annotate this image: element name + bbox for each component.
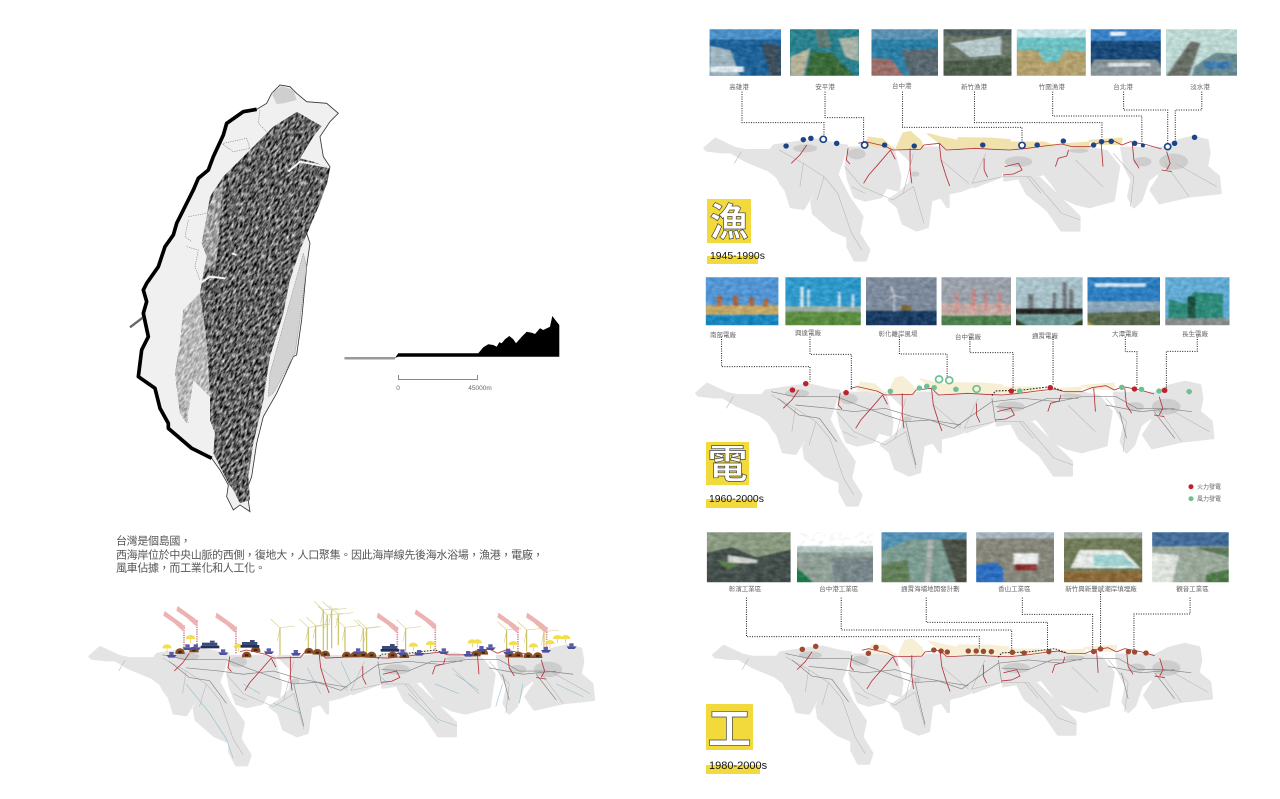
sea level band	[344, 357, 395, 360]
scale bar	[398, 375, 478, 380]
coastline map: beach and roads	[697, 377, 1213, 505]
period label 1960-2000s: 1960-2000s	[709, 494, 764, 505]
coastline map: beach and roads	[705, 132, 1220, 260]
terrain cross-section profile: 45000m	[468, 385, 492, 392]
port name labels: 新竹漁港	[961, 82, 988, 91]
park name labels: 新竹興新豐感潮岸填埋廠	[1065, 584, 1137, 593]
base map with roads and rivers	[90, 646, 593, 765]
port name labels: 高雄港	[729, 82, 749, 91]
north volcanic area	[272, 86, 297, 104]
wind turbines	[271, 601, 559, 655]
photo strip: industrial parks	[697, 526, 1238, 588]
factory mounds	[175, 646, 542, 658]
scale labels: 0	[396, 385, 400, 392]
port name labels	[729, 81, 1210, 91]
plant name labels: 彰化離岸風場	[878, 329, 918, 338]
legend: thermal and wind power: 火力發電	[1197, 483, 1221, 491]
smokestacks	[163, 606, 548, 653]
west coast bold line	[138, 109, 257, 458]
legend: thermal and wind power	[1188, 483, 1221, 503]
intro text block	[116, 534, 543, 574]
panel: power plants 電	[697, 272, 1237, 508]
coastal range	[268, 253, 307, 397]
intro text block: 台灣是個島國，	[116, 534, 191, 548]
coastal infrastructure icons	[162, 601, 577, 658]
port name labels: 淡水港	[1190, 82, 1210, 91]
park name labels: 彰濱工業區	[729, 584, 762, 593]
plant name labels: 大潭電廠	[1112, 329, 1138, 338]
panel: industrial parks 工	[697, 526, 1238, 774]
plant name labels: 台中電廠	[955, 332, 982, 341]
legend: thermal and wind power: 風力發電	[1197, 495, 1221, 503]
photo strip: ports	[701, 24, 1246, 81]
port name labels: 台中港	[892, 81, 912, 90]
plant name labels	[710, 328, 1208, 341]
port name labels: 台北港	[1113, 82, 1133, 91]
電 character tile: 電	[708, 443, 748, 487]
period label 1945-1990s: 1945-1990s	[710, 251, 765, 262]
intro text block: 西海岸位於中央山脈的西側，復地大，人口聚集。因此海岸線先後海水浴場，漁港，電廠，	[116, 548, 543, 562]
plant name labels: 興達電廠	[795, 328, 822, 337]
coastline map: beach and roads	[714, 639, 1211, 763]
plant name labels: 通霄電廠	[1032, 331, 1058, 340]
park name labels: 觀音工業區	[1176, 584, 1209, 593]
park name labels: 香山工業區	[998, 584, 1031, 593]
mountain range relief	[175, 112, 330, 503]
offshore pier	[130, 318, 143, 327]
park name labels	[729, 584, 1209, 593]
panel: fishing ports 漁	[701, 24, 1246, 264]
park markers and leader lines	[746, 592, 1190, 656]
plant markers and leader lines	[722, 337, 1197, 395]
profile silhouette	[395, 316, 559, 358]
period label 1980-2000s: 1980-2000s	[709, 760, 768, 772]
island land	[138, 85, 338, 512]
terrain cross-section profile	[344, 316, 559, 392]
port name labels: 安平港	[815, 82, 835, 91]
port markers and leader lines	[742, 92, 1202, 150]
port name labels: 竹圍漁港	[1039, 82, 1065, 91]
plant name labels: 南部電廠	[710, 330, 736, 339]
intro text block: 風車佔據，而工業化和人工化。	[116, 560, 266, 574]
beach umbrellas	[162, 635, 570, 652]
工 character tile: 工	[708, 705, 752, 754]
map: Taiwan relief with west coast highlighted	[129, 84, 339, 512]
composite coastal map	[90, 601, 593, 765]
park name labels: 通霄海埔地開發計劃	[901, 584, 960, 593]
park name labels: 台中港工業區	[819, 584, 859, 593]
fishing boats	[167, 640, 577, 658]
plant name labels: 長生電廠	[1182, 329, 1208, 338]
photo strip: power plants	[697, 272, 1237, 331]
county boundaries	[182, 110, 270, 423]
漁 character tile: 漁	[709, 202, 749, 245]
